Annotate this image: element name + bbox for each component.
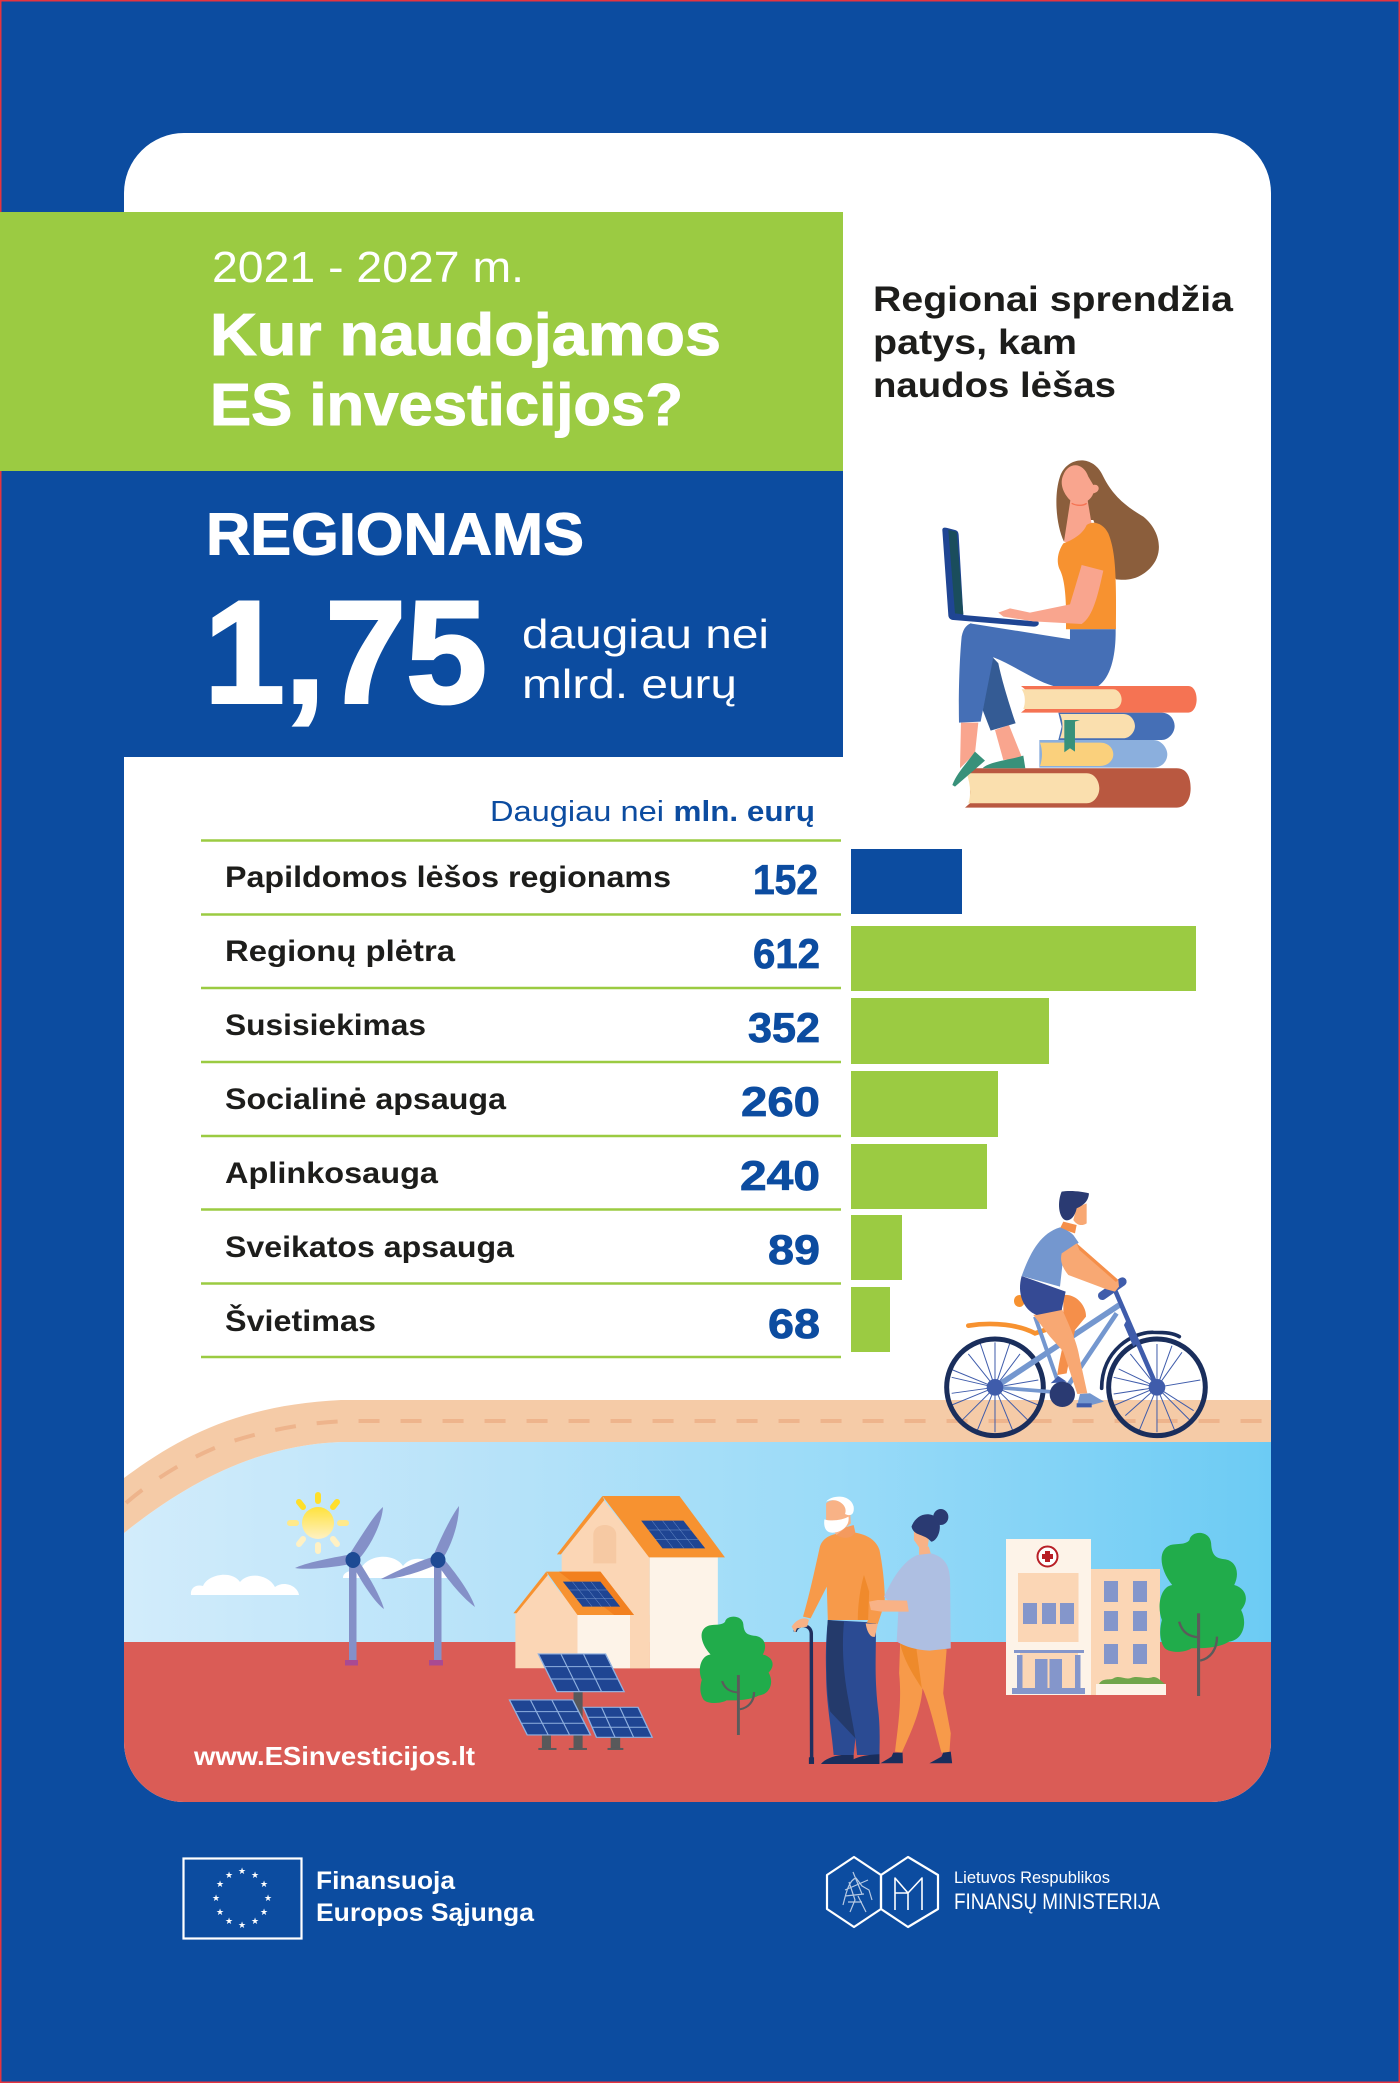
logo: EU flag: ★: [251, 1917, 259, 1927]
road: [124, 1400, 1271, 1533]
table row: Švietimas: Švietimas: [225, 1304, 376, 1338]
logo: EU flag: ★: [225, 1917, 233, 1927]
unit line one: daugiau nei: [522, 611, 769, 657]
logo: EU flag: ★: [264, 1894, 272, 1904]
table row: Sveikatos apsauga: 89: [768, 1226, 820, 1273]
table row: Socialinė apsauga: 260: [741, 1078, 820, 1125]
panel: green title band: [0, 212, 843, 471]
logo: EU flag: ★: [251, 1871, 259, 1881]
years label: 2021 - 2027 m.: [212, 243, 524, 292]
table row: Regionų plėtra: Regionų plėtra: [225, 935, 455, 968]
regions heading: REGIONAMS: [206, 502, 584, 568]
logo: finance ministry emblem: [827, 1857, 938, 1927]
ministry text: Lietuvos Respublikos: [954, 1868, 1110, 1887]
table header: [490, 796, 815, 828]
table row: Papildomos lėšos regionams: 152: [753, 856, 818, 903]
icon: large tree: [1160, 1533, 1246, 1696]
table row: Aplinkosauga: [225, 1144, 987, 1209]
funding text: Finansuoja: [316, 1867, 456, 1895]
side heading: naudos lėšas: [873, 366, 1116, 405]
table row: Aplinkosauga: Aplinkosauga: [225, 1157, 438, 1190]
icon: clouds: [191, 1557, 448, 1595]
icon: houses: [513, 1496, 725, 1668]
table row: Socialinė apsauga: [225, 1071, 998, 1137]
title line one: Kur naudojamos: [210, 302, 721, 368]
logo: EU flag: ★: [238, 1921, 246, 1931]
side heading: Regionai sprendžia: [873, 280, 1234, 319]
title line two: ES investicijos?: [210, 372, 683, 438]
logo: EU flag: ★: [212, 1894, 220, 1904]
big number: 1,75: [204, 570, 487, 734]
unit line two: mlrd. eurų: [522, 661, 737, 707]
panel: white card: [124, 133, 1271, 1802]
icon: ground solar panels: [509, 1654, 652, 1750]
side heading: [873, 280, 1234, 405]
logo: EU flag: ★: [238, 1867, 246, 1877]
panel: landscape scene: [124, 1400, 1271, 1802]
logo: EU flag: [184, 1858, 302, 1938]
ministry text: FINANSŲ MINISTERIJA: [954, 1889, 1160, 1914]
sky: [124, 1442, 1271, 1642]
table row: Socialinė apsauga: Socialinė apsauga: [225, 1083, 506, 1116]
panel: blue regions total: [124, 471, 843, 757]
table row: Susisiekimas: 352: [748, 1004, 820, 1051]
table row: Aplinkosauga: 240: [740, 1152, 820, 1199]
funding text: [316, 1867, 535, 1927]
table row: Susisiekimas: [225, 998, 1049, 1064]
funding text: Europos Sąjunga: [316, 1899, 535, 1927]
table header: Daugiau nei: [490, 796, 664, 828]
table row: Švietimas: [225, 1287, 890, 1352]
icon: small tree: [700, 1617, 773, 1735]
logo: EU flag: ★: [225, 1871, 233, 1881]
icon: cyclist: [947, 1191, 1205, 1436]
table row: Sveikatos apsauga: Sveikatos apsauga: [225, 1231, 514, 1264]
icon: elderly man and carer: [792, 1497, 952, 1764]
table row: Švietimas: 68: [768, 1300, 820, 1347]
table row: Papildomos lėšos regionams: [225, 849, 962, 914]
table row: Regionų plėtra: [225, 926, 1196, 991]
logo: EU flag: ★: [260, 1880, 268, 1890]
table row: Sveikatos apsauga: [225, 1215, 902, 1280]
icon: hospital: [1006, 1539, 1166, 1695]
side heading: patys, kam: [873, 323, 1077, 362]
logo: EU flag: ★: [260, 1908, 268, 1918]
icon: woman with laptop on books: [942, 460, 1197, 808]
table row: Susisiekimas: Susisiekimas: [225, 1009, 426, 1042]
table row: Regionų plėtra: 612: [753, 930, 820, 977]
table row: Papildomos lėšos regionams: Papildomos lėšos regionams: [225, 861, 671, 894]
icon: sun: [290, 1495, 346, 1551]
website url: www.ESinvesticijos.lt: [193, 1741, 475, 1771]
ministry text: [954, 1868, 1160, 1914]
ground: [124, 1642, 1271, 1802]
logo: EU flag: ★: [216, 1880, 224, 1890]
icon: wind turbines: [295, 1506, 475, 1666]
table header: mln. eurų: [674, 796, 815, 828]
logo: EU flag: ★: [216, 1908, 224, 1918]
